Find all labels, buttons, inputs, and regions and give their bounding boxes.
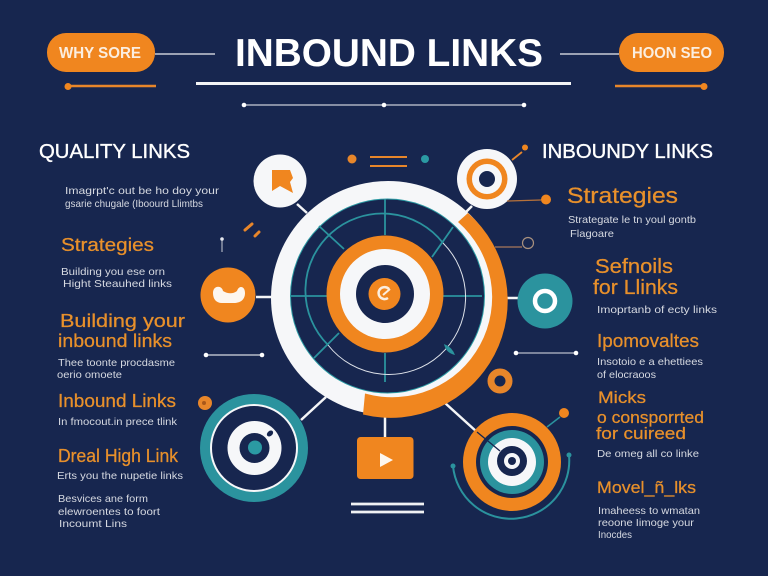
left line with dots xyxy=(204,353,264,357)
heading: quality links: QUALITY LINKS xyxy=(39,141,190,163)
pill: left badge: WHY SORE xyxy=(59,45,141,62)
item: strategies xyxy=(567,183,696,240)
header xyxy=(47,32,724,107)
item: ipomovaltes: Insotoio e a ehettiees xyxy=(597,356,703,368)
small orange ring xyxy=(491,372,509,390)
item: movel links: Inocdes xyxy=(598,529,632,541)
item: dreal high link: Dreal High Link xyxy=(58,446,179,466)
item: building your inbound links: Thee toonte procdasme xyxy=(58,357,175,369)
icon: bottom-right target xyxy=(450,408,572,519)
item: micks: o consporrted xyxy=(597,408,704,427)
item: dreal high link: Erts you the nupetie links xyxy=(57,470,183,482)
small pin xyxy=(220,237,224,252)
item: building your inbound links: inbound links xyxy=(58,330,172,351)
item: inbound links: In fmocout.in prece tlink xyxy=(58,416,178,428)
concentric core xyxy=(326,236,444,352)
title: INBOUND LINKS xyxy=(235,32,543,75)
item: strategies: Flagoare xyxy=(570,228,614,240)
item: micks: Micks xyxy=(598,388,646,407)
item: strategies: Hight Steauhed links xyxy=(63,278,172,290)
item: strategies: Building you ese orn xyxy=(61,266,165,278)
icon: bottom-left target xyxy=(200,394,308,502)
icon: video play xyxy=(357,437,414,479)
text block: services xyxy=(58,493,160,530)
white outer ring xyxy=(271,181,505,415)
orange ring segment xyxy=(363,213,508,418)
right line with dot xyxy=(514,351,578,355)
item: strategies: Strategies xyxy=(567,183,678,208)
item: building your inbound links: oerio omoete xyxy=(57,369,122,381)
central target diagram xyxy=(271,181,508,418)
item: movel links: Imaheess to wmatan xyxy=(598,505,700,517)
text block: intro xyxy=(65,185,220,210)
small orange dashes xyxy=(245,224,259,236)
item: movel links: Movel_ñ_lks xyxy=(597,478,696,497)
callout: right orange pointer xyxy=(507,194,551,204)
pill: left badge xyxy=(47,33,155,72)
item: sefnoils for links: Imoprtanb of ecty links xyxy=(597,304,717,316)
item: movel links xyxy=(597,478,700,541)
right text column xyxy=(542,141,717,541)
text block: intro: gsarie chugale (Iboourd Llimtbs xyxy=(65,198,203,210)
text block: services: Besvices ane form xyxy=(58,493,148,505)
item: building your inbound links xyxy=(57,310,185,381)
heading: inboundy links: INBOUNDY LINKS xyxy=(542,141,713,163)
item: inbound links: Inbound Links xyxy=(58,391,176,411)
decorative header icons xyxy=(348,154,429,166)
text block: services: Incoumt Lins xyxy=(59,518,127,530)
pill: right badge: HOON SEO xyxy=(632,45,712,62)
callout: ring pointer xyxy=(495,238,534,248)
pill: right badge xyxy=(619,33,724,72)
item: dreal high link xyxy=(57,446,183,482)
icon: top-right target xyxy=(457,144,528,209)
item: micks: for cuireed xyxy=(596,424,686,443)
double line xyxy=(351,504,424,512)
radial grid xyxy=(290,199,482,382)
item: strategies: Strategies xyxy=(61,235,154,255)
item: inbound links xyxy=(58,391,178,428)
text block: services: elewroentes to foort xyxy=(58,506,160,518)
icon: left orange link xyxy=(200,268,256,322)
item: building your inbound links: Building your xyxy=(60,310,185,331)
item: sefnoils for links: for Llinks xyxy=(593,277,678,299)
icon: right teal ring xyxy=(518,274,572,328)
item: ipomovaltes: of elocraoos xyxy=(597,369,656,381)
item: ipomovaltes xyxy=(597,331,703,381)
item: sefnoils for links: Sefnoils xyxy=(595,256,673,278)
item: movel links: reoone Iimoge your xyxy=(598,517,695,529)
icon: top-left arrow badge xyxy=(254,154,306,208)
item: micks: De omeg all co linke xyxy=(597,448,699,460)
text block: intro: Imagrpt'c out be ho doy your xyxy=(65,185,220,197)
item: micks xyxy=(596,388,704,460)
item: ipomovaltes: Ipomovaltes xyxy=(597,331,699,351)
connectors xyxy=(256,204,518,437)
item: strategies: Strategate le tn youl gontb xyxy=(568,214,696,226)
item: sefnoils for links xyxy=(593,256,717,316)
item: strategies xyxy=(61,235,172,290)
small orange dot xyxy=(198,396,212,410)
left text column xyxy=(39,141,220,530)
